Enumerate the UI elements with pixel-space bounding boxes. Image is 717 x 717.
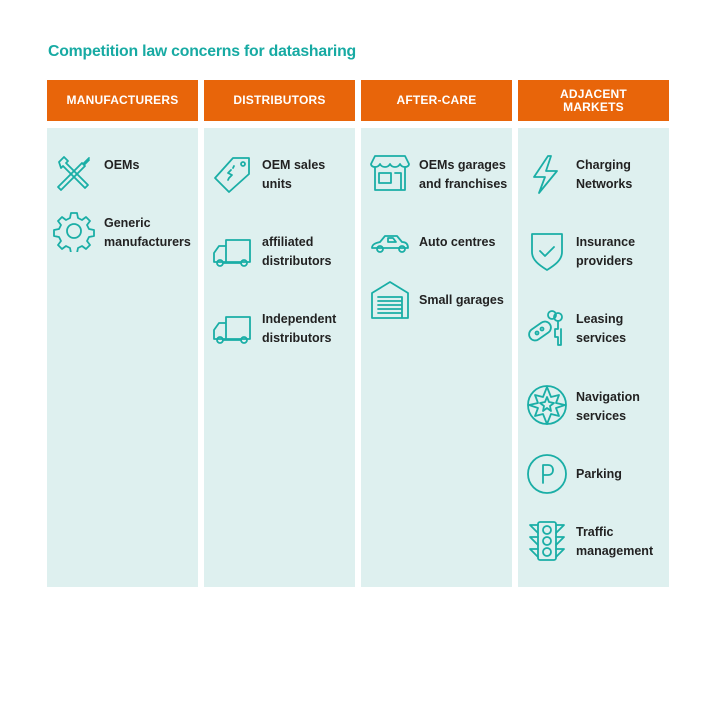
icon: parking bbox=[527, 454, 567, 494]
text: charging networks: Charging bbox=[576, 158, 631, 172]
header: manufacturers bbox=[47, 80, 198, 121]
text: OEM sales units: units bbox=[262, 176, 292, 190]
text: traffic management bbox=[576, 525, 653, 558]
header: manufacturers: MANUFACTURERS bbox=[67, 93, 178, 107]
text: navigation services: services bbox=[576, 408, 626, 422]
panel: adjacent markets bbox=[518, 128, 669, 587]
icon: traffic light bbox=[529, 521, 565, 561]
text: traffic management: management bbox=[576, 544, 653, 558]
text: leasing services bbox=[576, 312, 626, 344]
icon: truck bbox=[213, 239, 251, 267]
text: generic manufacturers: Generic bbox=[104, 216, 151, 230]
header: adjacent markets: MARKETS bbox=[563, 100, 624, 114]
panel: after-care bbox=[361, 128, 512, 587]
icon: lightning bbox=[533, 155, 558, 194]
text: independent distributors: Independent bbox=[262, 312, 336, 326]
text: OEMs garages: and franchises bbox=[419, 176, 507, 190]
header: after-care bbox=[361, 80, 512, 121]
text: traffic management: Traffic bbox=[576, 525, 614, 539]
text: OEMs garages: OEMs garages bbox=[419, 158, 506, 172]
panel: distributors bbox=[204, 128, 355, 587]
text: parking: Parking bbox=[576, 467, 622, 481]
text: leasing services: services bbox=[576, 330, 626, 344]
icon: car bbox=[371, 235, 409, 253]
text: insurance providers: Insurance bbox=[576, 235, 635, 249]
text: auto centres: Auto centres bbox=[419, 235, 495, 249]
text: leasing services: Leasing bbox=[576, 312, 623, 326]
icon: garage bbox=[371, 281, 409, 319]
icon: gear bbox=[53, 212, 95, 252]
icon: price tag bbox=[214, 157, 250, 193]
icon: truck 2 bbox=[213, 316, 251, 344]
text: small garages: Small garages bbox=[419, 293, 504, 307]
text: OEMs garages bbox=[419, 158, 507, 190]
text: charging networks: Networks bbox=[576, 176, 632, 190]
header: adjacent markets bbox=[518, 80, 669, 121]
header: distributors: DISTRIBUTORS bbox=[233, 93, 326, 107]
text: generic manufacturers bbox=[104, 216, 191, 248]
text: affiliated distributors bbox=[262, 235, 331, 268]
header: after-care: AFTER-CARE bbox=[396, 93, 476, 107]
text: insurance providers bbox=[576, 235, 635, 268]
text: independent distributors bbox=[262, 312, 336, 344]
icon: tools bbox=[57, 156, 90, 191]
header: adjacent markets: ADJACENT bbox=[560, 86, 627, 100]
text: navigation services bbox=[576, 390, 640, 422]
text: charging networks bbox=[576, 158, 632, 190]
text: OEM sales units: OEM sales bbox=[262, 158, 325, 172]
header: distributors bbox=[204, 80, 355, 121]
text: affiliated distributors: affiliated bbox=[262, 235, 313, 249]
icon: compass bbox=[527, 385, 567, 425]
text: affiliated distributors: distributors bbox=[262, 254, 331, 268]
text: OEMs: OEMs bbox=[104, 158, 139, 172]
panel: manufacturers bbox=[47, 128, 198, 587]
icon: shop bbox=[370, 155, 410, 191]
title: Competition law concerns for datasharing bbox=[48, 43, 356, 60]
icon: shield bbox=[531, 233, 563, 271]
text: insurance providers: providers bbox=[576, 254, 633, 268]
text: generic manufacturers: manufacturers bbox=[104, 234, 191, 248]
icon: car key bbox=[528, 310, 563, 346]
text: OEM sales units bbox=[262, 158, 325, 190]
text: navigation services: Navigation bbox=[576, 390, 640, 404]
text: independent distributors: distributors bbox=[262, 330, 331, 344]
